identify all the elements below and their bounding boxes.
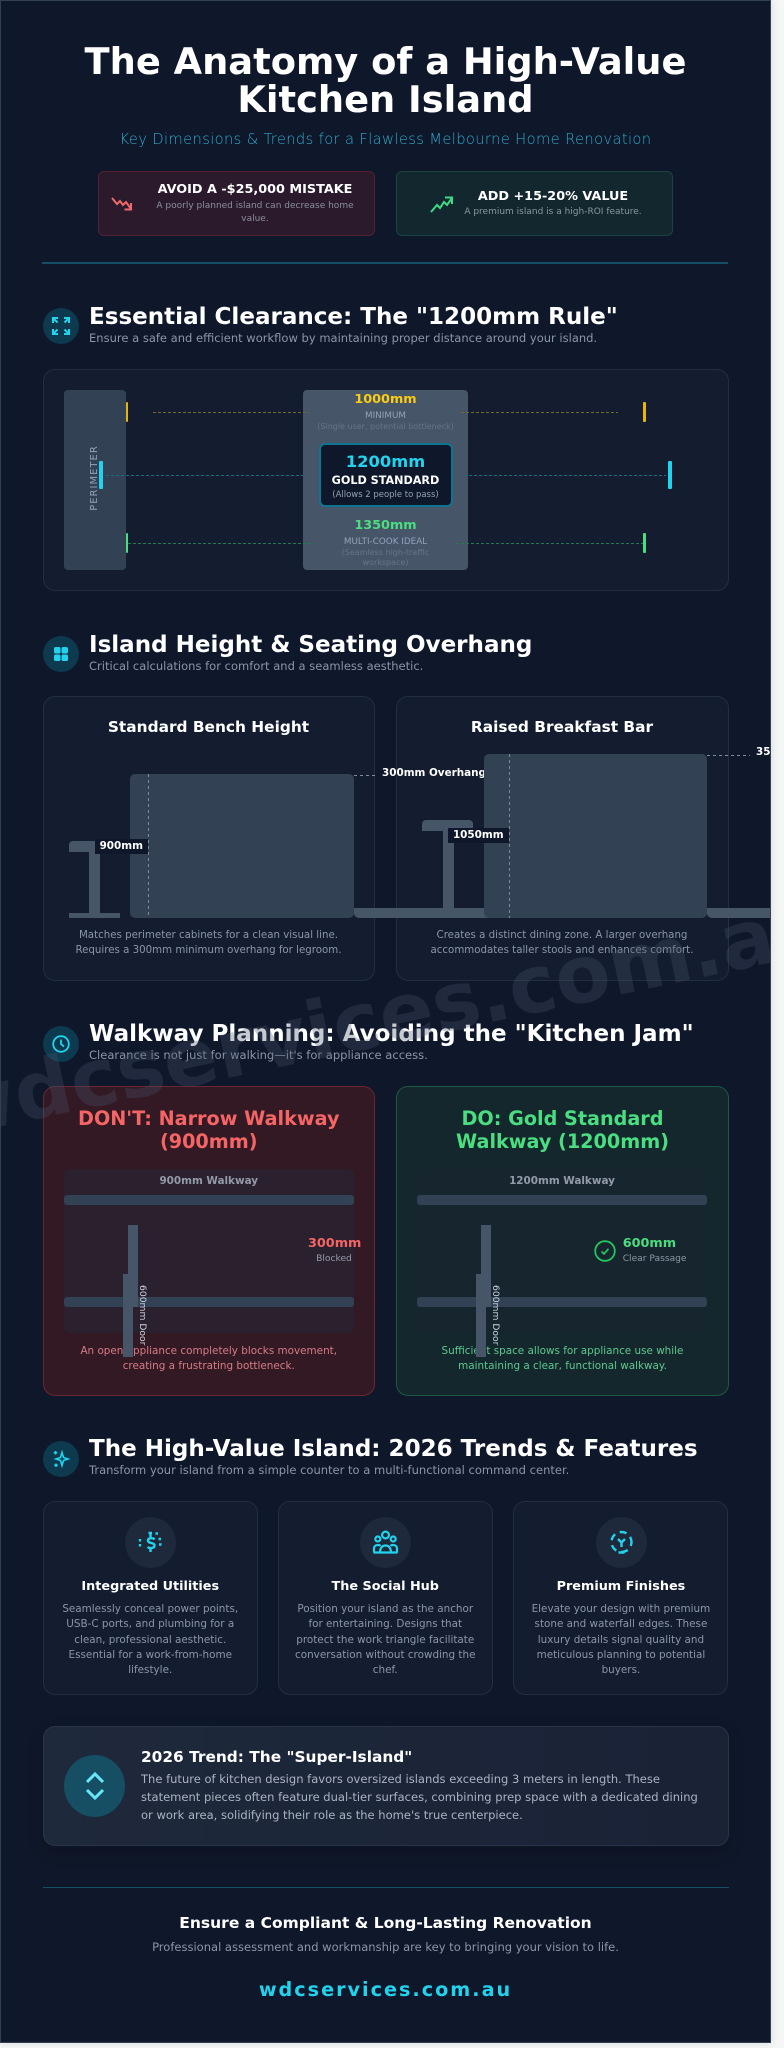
door overlap for captions [476, 1340, 486, 1357]
icon: check circle [594, 1240, 616, 1262]
card text: Seamlessly conceal power points, [62, 1603, 238, 1615]
footer text: Professional assessment and workmanship are key to bringing your vision to life. [152, 1940, 619, 1954]
blocked stat [308, 1236, 361, 1264]
label: 1350mm multi-cook ideal: (Seamless high-traffic [342, 548, 429, 557]
callout text: value. [241, 214, 269, 224]
panel: standard bench height [42, 696, 374, 981]
overhang leader [354, 775, 377, 776]
card text: conversation without crowding the [295, 1649, 475, 1661]
floor strip right [707, 908, 771, 918]
card text: buyers. [602, 1664, 640, 1676]
blocked stat: 300mm [308, 1236, 361, 1251]
diagram label: 900mm Walkway [159, 1175, 258, 1187]
counter top [417, 1195, 707, 1205]
card text: USB-C ports, and plumbing for a [66, 1618, 234, 1630]
trend text: The future of kitchen design favors oversized islands exceeding 3 meters in length. These [141, 1772, 660, 1786]
diagram: 1200mm walkway [417, 1169, 707, 1333]
counter top [64, 1195, 354, 1205]
panel: super-island trend [42, 1726, 728, 1846]
card description: Matches perimeter cabinets for a clean visual line. [79, 929, 338, 941]
don't caption [80, 1345, 337, 1372]
label: 1000mm minimum: (Single user, potential bottleneck) [317, 422, 454, 431]
card text: Position your island as the anchor [297, 1603, 473, 1615]
callout: avoid mistake [98, 171, 375, 236]
cyan gold standard clearance lines [99, 461, 672, 489]
label: 1000mm minimum [317, 392, 454, 431]
height label: 900mm: 900mm [100, 840, 143, 852]
do heading [456, 1107, 669, 1153]
card: premium finishes [513, 1501, 728, 1695]
label: 1200mm gold standard: 1200mm [346, 452, 425, 470]
callout text: A premium island is a high-ROI feature. [464, 207, 642, 217]
icon: chevrons [64, 1755, 125, 1817]
panel: don't narrow walkway [42, 1086, 375, 1396]
card: integrated utilities [42, 1501, 258, 1695]
footer heading: Ensure a Compliant & Long-Lasting Renovation [179, 1914, 592, 1932]
appliance door [476, 1225, 491, 1340]
don't caption: creating a frustrating bottleneck. [123, 1360, 295, 1372]
counter bottom [64, 1297, 354, 1307]
do caption [442, 1345, 683, 1372]
callout text: A poorly planned island can decrease home [156, 201, 354, 211]
do heading: DO: Gold Standard [462, 1107, 664, 1130]
card text: clean, professional aesthetic. [74, 1634, 226, 1646]
callout title: ADD +15-20% VALUE [478, 189, 628, 204]
card: social hub [278, 1501, 492, 1695]
diagram: standard island block [130, 774, 354, 918]
island block [303, 390, 468, 570]
overhang label: 300mm: 300mm Overhang [382, 767, 486, 779]
card heading: Standard Bench Height [108, 718, 309, 736]
heading: island height: Island Height & Seating Overhang [89, 632, 532, 658]
callout title: AVOID A -$25,000 MISTAKE [158, 182, 352, 197]
counter bottom [417, 1297, 707, 1307]
label: 1200mm gold standard: GOLD STANDARD [332, 474, 439, 486]
card text [532, 1603, 710, 1676]
card text [62, 1603, 238, 1676]
diagram: standard stool [69, 841, 120, 918]
subheading: Critical calculations for comfort and a seamless aesthetic. [89, 659, 423, 673]
section icon: expand arrows [42, 308, 78, 344]
label: 1000mm minimum: MINIMUM [365, 410, 406, 420]
card description: Requires a 300mm minimum overhang for legroom. [75, 944, 342, 956]
card text: luxury details signal quality and [538, 1634, 704, 1646]
card heading: Raised Breakfast Bar [471, 718, 653, 736]
don't caption: An open appliance completely blocks movement, [80, 1345, 337, 1357]
trend title: 2026 Trend: The "Super-Island" [141, 1748, 412, 1766]
do heading: Walkway (1200mm) [456, 1130, 669, 1153]
diagram: raised island block [484, 754, 707, 918]
don't heading: (900mm) [160, 1130, 258, 1153]
card text: stone and waterfall edges. These [535, 1618, 707, 1630]
diagram: 900mm walkway [64, 1169, 354, 1333]
card text: Elevate your design with premium [532, 1603, 710, 1615]
don't heading: DON'T: Narrow Walkway [78, 1107, 339, 1130]
label: 1200mm gold standard: (Allows 2 people to pass) [332, 489, 439, 499]
subtitle: Key Dimensions & Trends for a Flawless Melbourne Home Renovation [120, 130, 651, 148]
icon: people [360, 1517, 411, 1568]
card text: lifestyle. [128, 1664, 172, 1676]
appliance door [123, 1225, 138, 1340]
card description [431, 929, 693, 956]
green multi-cook clearance lines [126, 533, 646, 553]
door label: 600mm Door [490, 1285, 501, 1345]
label: 1350mm multi-cook ideal: 1350mm [354, 518, 417, 533]
title [84, 40, 686, 121]
title: Kitchen Island [237, 78, 534, 121]
callout: add value [396, 171, 673, 236]
height line [148, 774, 149, 918]
card title: The Social Hub [332, 1579, 439, 1594]
height label: 1050mm [448, 828, 508, 843]
height line [509, 754, 510, 918]
section icon: sparkles [42, 1441, 78, 1477]
subheading: Ensure a safe and efficient workflow by maintaining proper distance around your island. [89, 331, 597, 345]
footer url: wdcservices.com.au [259, 1978, 512, 2001]
heading: essential clearance: Essential Clearance: The "1200mm Rule" [89, 304, 618, 330]
heading: walkway planning: Walkway Planning: Avoiding the "Kitchen Jam" [89, 1020, 694, 1046]
card text: Essential for a work-from-home [69, 1649, 232, 1661]
don't heading [78, 1107, 340, 1153]
do caption: Sufficient space allows for appliance use while [442, 1345, 683, 1357]
card description: accommodates taller stools and enhances comfort. [431, 944, 693, 956]
panel: raised breakfast bar [396, 696, 728, 981]
callout text [156, 201, 354, 224]
subheading: Transform your island from a simple counter to a multi-functional command center. [89, 1463, 569, 1477]
section icon: clock [42, 1026, 78, 1062]
card title: Integrated Utilities [81, 1579, 219, 1594]
door overlap for captions [123, 1340, 133, 1357]
trend text [140, 1772, 698, 1822]
card text: for entertaining. Designs that [308, 1618, 462, 1630]
icon: dashed circle [596, 1517, 646, 1568]
height label: 1050mm: 1050mm [453, 829, 504, 841]
trend text: statement pieces often feature dual-tier surfaces, combining prep space with a dedicated dining [141, 1790, 698, 1804]
perimeter label: PERIMETER [89, 445, 100, 511]
height label: 900mm [94, 839, 148, 854]
heading: trends and features: The High-Value Island: 2026 Trends & Features [89, 1436, 698, 1462]
card text: protect the work triangle facilitate [296, 1634, 474, 1646]
title: The Anatomy of a High-Value [85, 40, 686, 83]
do caption: maintaining a clear, functional walkway. [458, 1360, 667, 1372]
blocked stat: Blocked [316, 1254, 352, 1264]
label: 1350mm multi-cook ideal: workspace) [363, 558, 408, 567]
subheading: Clearance is not just for walking—it's for appliance access. [89, 1048, 428, 1062]
card title: Premium Finishes [557, 1579, 685, 1594]
section icon: grid [42, 636, 78, 672]
clear passage stat: 600mm [623, 1236, 676, 1251]
overhang leader [707, 754, 750, 756]
card text: meticulous planning to potential [537, 1649, 705, 1661]
clear passage stat [623, 1236, 687, 1264]
label: 1350mm multi-cook ideal: MULTI-COOK IDEAL [344, 536, 427, 546]
clear passage stat: Clear Passage [623, 1254, 687, 1264]
card text [295, 1603, 475, 1676]
label: 1350mm multi-cook ideal [342, 518, 429, 567]
floor strip [354, 908, 494, 918]
label: 1000mm minimum: 1000mm [354, 392, 417, 407]
panel: clearance diagram [42, 369, 728, 591]
icon: trending down [111, 197, 132, 210]
card description [75, 929, 342, 956]
label: 1200mm gold standard [318, 443, 452, 507]
icon: trending up [430, 196, 453, 213]
panel: do gold standard walkway [396, 1086, 729, 1396]
gold minimum clearance lines [126, 402, 646, 422]
icon: utilities [124, 1517, 176, 1568]
door label: 600mm Door [137, 1285, 148, 1345]
card text: chef. [373, 1664, 398, 1676]
trend text: or work area, solidifying their role as the home's true centerpiece. [141, 1808, 523, 1822]
perimeter bar [64, 390, 126, 570]
card description: Creates a distinct dining zone. A larger overhang [437, 929, 687, 941]
diagram label: 1200mm Walkway [509, 1175, 615, 1187]
diagram: raised stool [422, 820, 473, 908]
